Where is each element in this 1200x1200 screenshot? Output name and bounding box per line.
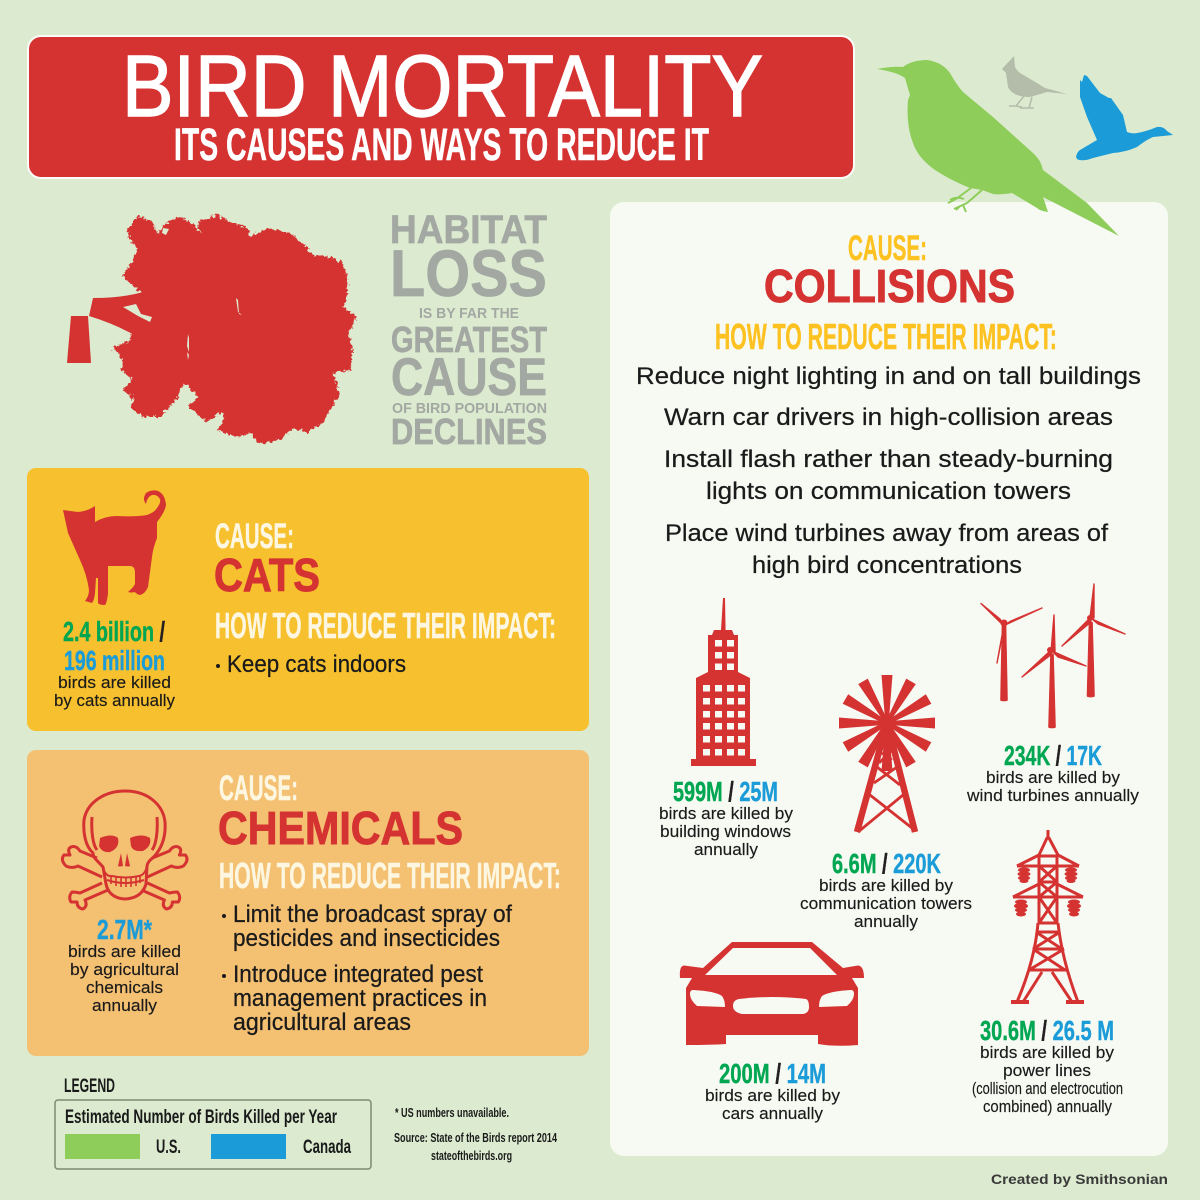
stat: communication towers: communication towers [800,895,972,913]
legend: Estimated Number of Birds Killed per Year [65,1106,337,1128]
chemicals measures list: management practices in [233,985,487,1012]
stat: power lines: birds are killed by [980,1044,1115,1062]
stat: power lines: combined) annually [983,1098,1113,1116]
stat: cats: 196 million [64,645,165,676]
panel: cats [27,468,589,731]
chemicals measures list [222,901,512,1036]
icon: car [680,942,864,1046]
legend [55,1076,371,1169]
panel: chemicals [27,750,589,1056]
source notes [394,1106,557,1163]
stat: communication towers [800,848,972,931]
icon: blue duck [1076,75,1173,160]
chemicals measures list: Introduce integrated pest [233,961,483,988]
habitat loss text block: OF BIRD POPULATION [392,400,547,417]
habitat loss text block: DECLINES [391,411,547,452]
chemicals measures list: pesticides and insecticides [233,925,500,952]
stat: building windows: annually [694,841,759,859]
stat: power lines: power lines [1003,1062,1091,1080]
source notes: stateofthebirds.org [431,1149,512,1163]
icon: building [691,598,756,766]
stat: cars: cars annually [722,1105,824,1123]
stat: communication towers: 6.6M / 220K [832,848,941,879]
source notes: * US numbers unavailable. [395,1106,509,1120]
stat: building windows: building windows [660,823,791,841]
icon: communication tower [839,675,935,832]
credit: Created by Smithsonian [991,1171,1168,1187]
icon: green bird [877,60,1119,236]
stat: cars: 200M / 14M [719,1058,826,1089]
stat: power lines [972,1015,1123,1116]
legend swatch: Canada: Canada [303,1136,351,1158]
stat: chemicals [68,914,181,1015]
stat: power lines: (collision and electrocution [972,1080,1123,1098]
chemicals measures list: Limit the broadcast spray of [233,901,512,928]
icon: tree with axe cut [67,215,357,444]
collisions measures list: Install flash rather than steady-burning [664,446,1113,473]
panel: collisions [610,202,1168,1156]
collisions cause label: CAUSE: [848,229,927,268]
stat: cats: 2.4 billion / [63,616,165,647]
title banner [28,36,854,178]
collisions measures list: Place wind turbines away from areas of [665,520,1108,547]
stat: chemicals: birds are killed [68,943,181,961]
icon: power line pylon [1011,830,1084,1004]
stat: cats [54,616,176,710]
cats measure: Keep cats indoors [227,651,406,678]
cats cause label: CAUSE: [215,517,294,556]
stat: cats: by cats annually [54,692,176,710]
legend swatch: U.S. [65,1134,181,1159]
stat: chemicals: 2.7M* [97,914,152,945]
stat: cars [705,1058,841,1123]
habitat loss text block: GREATEST [391,319,547,360]
stat: building windows: birds are killed by [659,805,794,823]
stat: cats: birds are killed [58,674,171,692]
legend: LEGEND [64,1076,115,1097]
subtitle: ITS CAUSES AND WAYS TO REDUCE IT [174,119,709,170]
stat: cars: birds are killed by [705,1087,841,1105]
legend swatch: U.S.: U.S. [156,1136,181,1158]
icon: wind turbines [981,584,1125,728]
stat: chemicals: by agricultural [70,961,179,979]
collisions measures list: Reduce night lighting in and on tall buildings [636,363,1141,390]
stat: wind turbines: wind turbines annually [966,787,1140,805]
icon: cat [63,490,166,605]
icon: grey bird [1002,56,1067,108]
habitat loss text block: CAUSE [391,348,547,407]
collisions measures list: lights on communication towers [706,478,1071,505]
habitat loss text block [390,208,547,452]
collisions heading: COLLISIONS [764,260,1015,312]
cats how-to heading: HOW TO REDUCE THEIR IMPACT: [215,605,556,646]
chemicals heading: CHEMICALS [218,802,463,854]
stat: wind turbines: birds are killed by [986,769,1121,787]
habitat loss text block: HABITAT [390,208,547,252]
stat: chemicals: chemicals [86,979,163,997]
stat: wind turbines [966,740,1140,805]
legend swatch: Canada [211,1134,351,1159]
chemicals cause label: CAUSE: [219,769,298,808]
stat: communication towers: birds are killed by [819,877,954,895]
title: BIRD MORTALITY [122,38,763,135]
stat: power lines: 30.6M / 26.5 M [980,1015,1114,1046]
stat: wind turbines: 234K / 17K [1004,740,1102,771]
chemicals measures list: agricultural areas [233,1009,411,1036]
collisions measures list [636,363,1141,579]
icon: skull and crossbones [62,791,187,909]
collisions measures list: high bird concentrations [752,552,1022,579]
cats heading: CATS [214,549,320,601]
habitat loss text block: LOSS [390,236,547,310]
source notes: Source: State of the Birds report 2014 [394,1131,557,1145]
habitat loss text block: IS BY FAR THE [419,305,519,322]
stat: building windows: 599M / 25M [673,776,778,807]
stat: communication towers: annually [854,913,919,931]
chemicals how-to heading: HOW TO REDUCE THEIR IMPACT: [219,855,561,896]
stat: chemicals: annually [92,997,158,1015]
stat: building windows [659,776,794,859]
collisions measures list: Warn car drivers in high-collision areas [664,404,1113,431]
